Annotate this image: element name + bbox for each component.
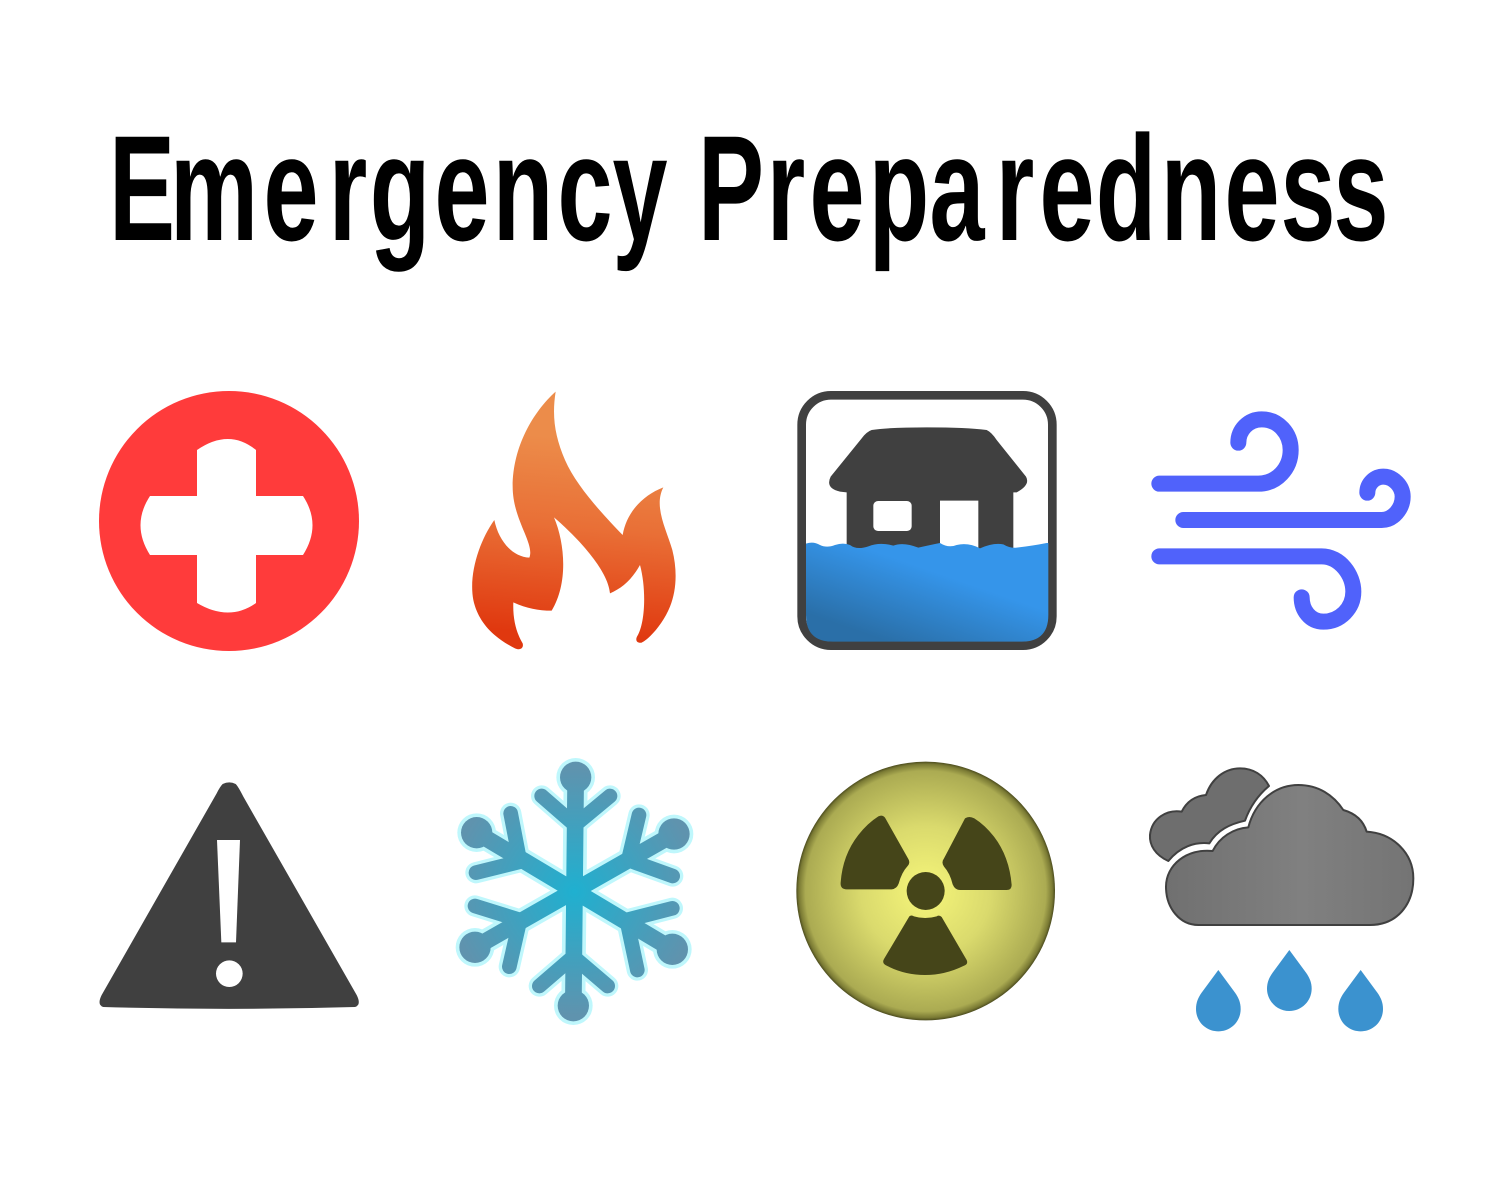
icon: snowflake xyxy=(456,758,693,1025)
icon: flooded house xyxy=(802,395,1052,646)
icon: wind xyxy=(1159,419,1403,622)
large cloud xyxy=(1166,785,1413,925)
rain drops xyxy=(1196,950,1383,1031)
small cloud xyxy=(1150,768,1269,861)
title: Emergency Preparedness xyxy=(109,104,1389,272)
icon: fire xyxy=(472,392,676,649)
icon: first aid cross xyxy=(99,391,359,651)
icon: warning triangle xyxy=(100,782,359,1009)
icon: rain cloud xyxy=(1150,768,1413,1031)
icon: radiation xyxy=(796,762,1055,1020)
